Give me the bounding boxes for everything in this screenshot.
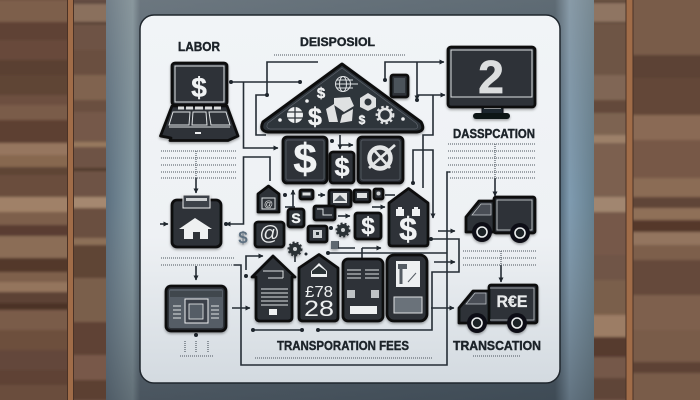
small tag: @	[264, 199, 273, 209]
heading: transcation: TRANSCATION	[453, 338, 541, 353]
icon: hexagon nut	[360, 93, 376, 111]
icon: medium dollar box: $	[334, 152, 350, 182]
icon: checklist card	[343, 259, 383, 321]
icon: number tag: 28	[304, 296, 334, 321]
icon: document house tag	[252, 256, 295, 321]
small tag	[258, 186, 279, 212]
dollar box	[355, 213, 381, 240]
gear one	[336, 224, 350, 236]
at-sign box: @	[259, 223, 280, 245]
icon: gear	[377, 107, 393, 123]
icon: home card	[172, 195, 221, 247]
icon: labelled delivery truck: R€E	[496, 292, 528, 311]
icon: globe	[336, 76, 358, 92]
button box	[354, 190, 370, 202]
icon: delivery truck	[466, 197, 535, 243]
gear two	[288, 242, 302, 256]
icon: monitor with number	[448, 47, 535, 119]
heading: transporation fees: TRANSPORATION FEES	[277, 338, 409, 353]
gray square	[331, 241, 338, 249]
icon: small device	[391, 75, 408, 97]
dotted caption rules	[161, 55, 536, 358]
small tab box	[300, 190, 313, 199]
icon: tag with figures and dollar	[389, 188, 428, 247]
tiny card box	[308, 226, 327, 242]
icon: image panel card	[387, 255, 427, 321]
cluster: small icons	[238, 186, 383, 256]
heading: labor: LABOR	[178, 39, 221, 54]
S box	[288, 209, 304, 227]
icon: laptop with dollar: $	[191, 72, 207, 103]
icon: number tag	[299, 254, 338, 321]
icon: banded coin	[286, 107, 304, 123]
icon: document device	[166, 286, 226, 331]
icon: tiny dollar: $	[359, 113, 366, 127]
heading: dasspcation: DASSPCATION	[453, 126, 535, 141]
icon: small dollar: $	[317, 85, 326, 102]
white card panel	[140, 15, 560, 383]
at-sign box	[255, 222, 284, 247]
icon: monitor with number: 2	[478, 51, 504, 103]
S box: S	[291, 210, 301, 226]
gray dollar: $	[238, 228, 248, 247]
icon: recycle arrows	[326, 97, 354, 123]
icon: large dollar box	[283, 135, 327, 183]
icon: crossed circle box	[358, 137, 403, 183]
heading: disposal: DEISPOSIOL	[300, 35, 375, 49]
icon: labelled delivery truck	[459, 285, 537, 333]
panel: roof with cost icons	[262, 64, 423, 132]
icon: laptop with dollar	[160, 63, 238, 140]
icon: large dollar box: $	[293, 135, 317, 182]
icon: large dollar: $	[308, 103, 322, 131]
icon: tag with figures and dollar: $	[399, 211, 417, 247]
connector lines and arrows	[160, 62, 501, 365]
roof dots	[278, 99, 405, 122]
icon: number tag: £78	[305, 284, 333, 301]
dollar box: $	[361, 213, 375, 240]
slate backing panel	[106, 0, 594, 400]
pin box	[374, 189, 383, 199]
image box	[329, 190, 351, 207]
L-shaped box	[314, 206, 335, 220]
icon: medium dollar box	[330, 152, 354, 183]
